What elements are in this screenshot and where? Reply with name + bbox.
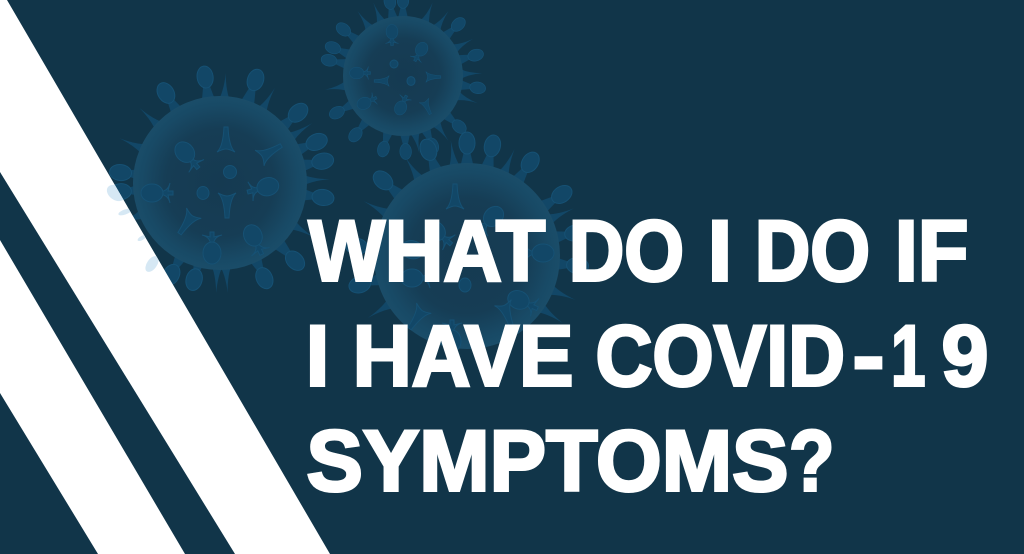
- title: WHAT: [308, 204, 545, 300]
- title: I: [306, 308, 329, 404]
- body: top virus sphere: [343, 16, 463, 136]
- body: lower right virus sphere: [374, 163, 560, 349]
- title: HAVE: [353, 308, 574, 404]
- body: left virus sphere: [133, 96, 307, 270]
- faint virus spikes showing on white stripe: [106, 184, 158, 272]
- title: SYMPTOMS: [306, 414, 788, 510]
- white diagonal stripe: narrow: [0, 240, 185, 554]
- title: I: [708, 204, 732, 300]
- virus: top: [320, 0, 486, 160]
- title: ?: [789, 414, 834, 510]
- title: DO: [569, 204, 684, 300]
- title: 9: [942, 308, 988, 404]
- title: COVID: [596, 308, 845, 404]
- title: IF: [895, 204, 968, 300]
- title: -: [852, 308, 884, 404]
- virus: left: [109, 65, 335, 293]
- title: 1: [891, 308, 926, 404]
- virus: lower right: [345, 132, 589, 352]
- white diagonal stripe: wide: [0, 0, 330, 554]
- title: [306, 204, 988, 510]
- title: DO: [755, 204, 870, 300]
